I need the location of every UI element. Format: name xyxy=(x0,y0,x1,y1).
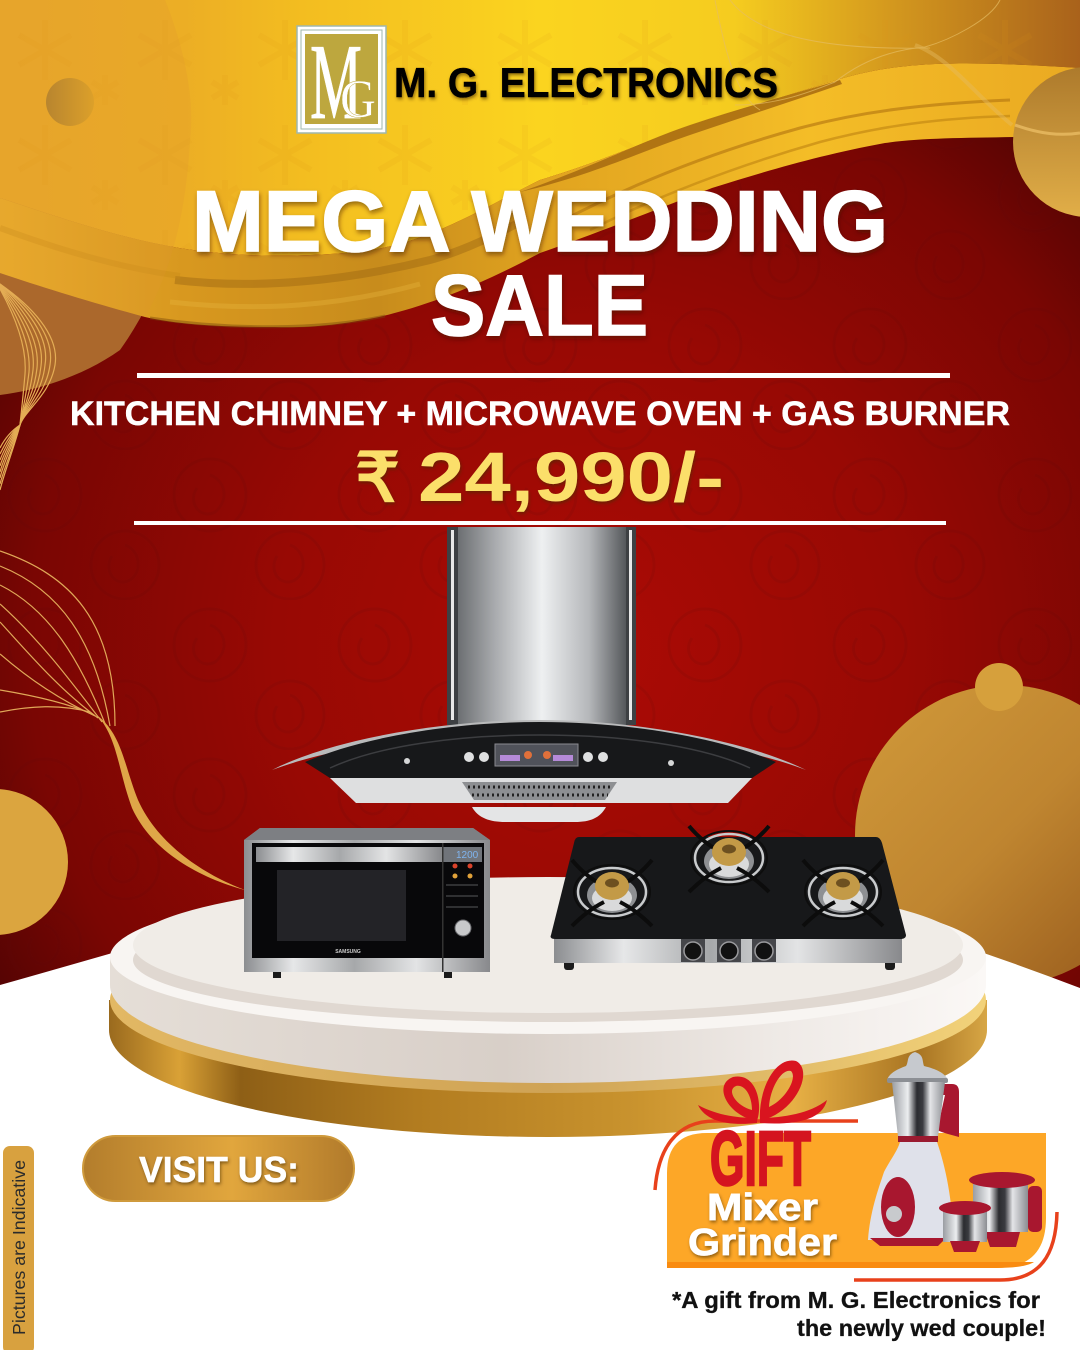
price: ₹ xyxy=(355,440,400,516)
translucent gold shape upper left xyxy=(0,0,191,395)
mixer grinder words: Grinder xyxy=(688,1222,837,1264)
gold sphere top left xyxy=(46,78,94,126)
logo: G xyxy=(340,69,376,129)
price: 24,990/- xyxy=(418,438,724,516)
gift note xyxy=(672,1287,1046,1341)
upper divider xyxy=(137,373,950,378)
visit us button: VISIT US: xyxy=(139,1149,299,1190)
title: SALE xyxy=(431,258,648,354)
gold sphere left xyxy=(0,789,68,935)
microwave oven: SAMSUNG xyxy=(335,949,361,955)
small gold sphere right xyxy=(975,663,1023,711)
title: MEGA WEDDING xyxy=(192,174,888,270)
gas burner xyxy=(551,826,906,970)
gold sphere top right xyxy=(1013,67,1080,217)
mixer grinder words xyxy=(688,1187,837,1264)
gift ribbon outline xyxy=(655,1121,1057,1280)
gold line ribbon upper left xyxy=(0,284,56,490)
pictures disclaimer: Pictures are Indicative xyxy=(9,1160,29,1335)
kitchen chimney xyxy=(272,527,806,822)
platform xyxy=(109,877,987,1137)
gift note: *A gift from M. G. Electronics for xyxy=(672,1287,1040,1313)
pictures disclaimer xyxy=(3,1146,34,1350)
product list: KITCHEN CHIMNEY + MICROWAVE OVEN + GAS BURNER xyxy=(70,395,1010,433)
microwave oven: 1200 xyxy=(456,850,479,861)
logo: M xyxy=(310,23,362,142)
background: gold wave banner xyxy=(0,0,1080,327)
logo xyxy=(297,23,386,142)
gift panel xyxy=(655,1061,1057,1280)
decorative thin gold lines top right xyxy=(715,0,1012,125)
gift word: GIFT xyxy=(710,1116,811,1202)
mixer grinder xyxy=(868,1052,1042,1252)
gold line fan and ribbon left xyxy=(0,551,245,890)
white ground xyxy=(0,945,1080,1350)
translucent overlay on gold xyxy=(0,0,191,317)
gift note: the newly wed couple! xyxy=(797,1315,1046,1341)
microwave oven xyxy=(244,828,490,978)
lower divider xyxy=(134,521,946,525)
title xyxy=(192,174,888,354)
mixer grinder words: Mixer xyxy=(707,1187,818,1229)
gold sphere right xyxy=(855,685,1080,985)
brand name: M. G. ELECTRONICS xyxy=(394,59,778,106)
gift bow xyxy=(698,1061,827,1124)
visit us button xyxy=(83,1136,354,1201)
price xyxy=(355,438,724,516)
